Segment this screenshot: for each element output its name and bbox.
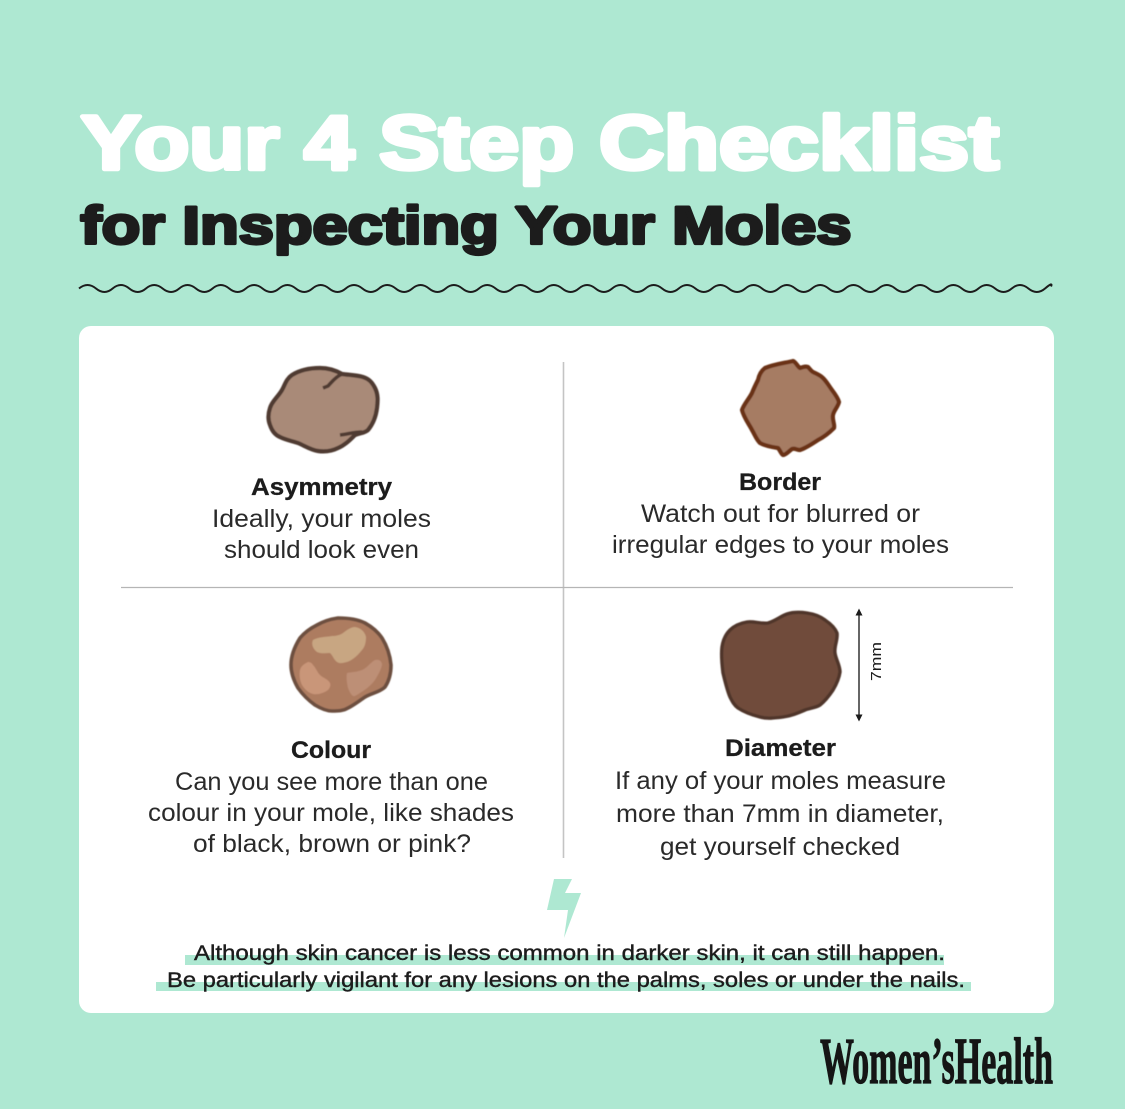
callout: darker skin note: Be particularly vigilant for any lesions on the palms, soles or under the nails. (167, 969, 965, 992)
callout: darker skin note (156, 942, 971, 992)
text: border description: irregular edges to your moles (612, 531, 949, 559)
icon: irregular border mole (742, 361, 839, 455)
text: colour description: of black, brown or pink? (193, 830, 471, 858)
step: diameter (615, 608, 946, 861)
text: asymmetry description: Ideally, your moles (212, 505, 431, 533)
heading: colour: Colour (291, 737, 371, 764)
icon: large mole (722, 612, 840, 718)
heading: asymmetry: Asymmetry (251, 474, 393, 501)
text: diameter description (615, 767, 946, 861)
panel: checklist card (79, 326, 1054, 1013)
step: colour (148, 618, 514, 858)
title (80, 101, 999, 256)
text: colour description: colour in your mole, like shades (148, 799, 514, 827)
text: asymmetry description: should look even (224, 536, 419, 564)
text: colour description: Can you see more than one (175, 768, 488, 796)
text: border description: Watch out for blurred or (641, 500, 920, 528)
title line 2: for Inspecting Your Moles (80, 196, 852, 256)
heading: border: Border (739, 469, 821, 496)
text: border description (612, 500, 949, 559)
heading: diameter: Diameter (725, 735, 836, 762)
text: asymmetry description (212, 505, 431, 564)
callout: darker skin note: Although skin cancer is less common in darker skin, it can still happen. (194, 942, 945, 965)
text: diameter description: more than 7mm in diameter, (616, 800, 944, 828)
text: diameter description: get yourself checked (660, 833, 900, 861)
title line 1: Your 4 Step Checklist (81, 101, 999, 186)
icon: lightning bolt (547, 879, 581, 938)
label: 7mm: 7mm (868, 642, 885, 681)
text: colour description (148, 768, 514, 858)
text: diameter description: If any of your moles measure (615, 767, 946, 795)
icon: multicoloured mole (291, 618, 391, 711)
icon: asymmetrical mole (268, 368, 378, 451)
step: border (612, 361, 949, 559)
arrow: 7mm dimension (856, 608, 885, 722)
step: asymmetry (212, 368, 431, 564)
